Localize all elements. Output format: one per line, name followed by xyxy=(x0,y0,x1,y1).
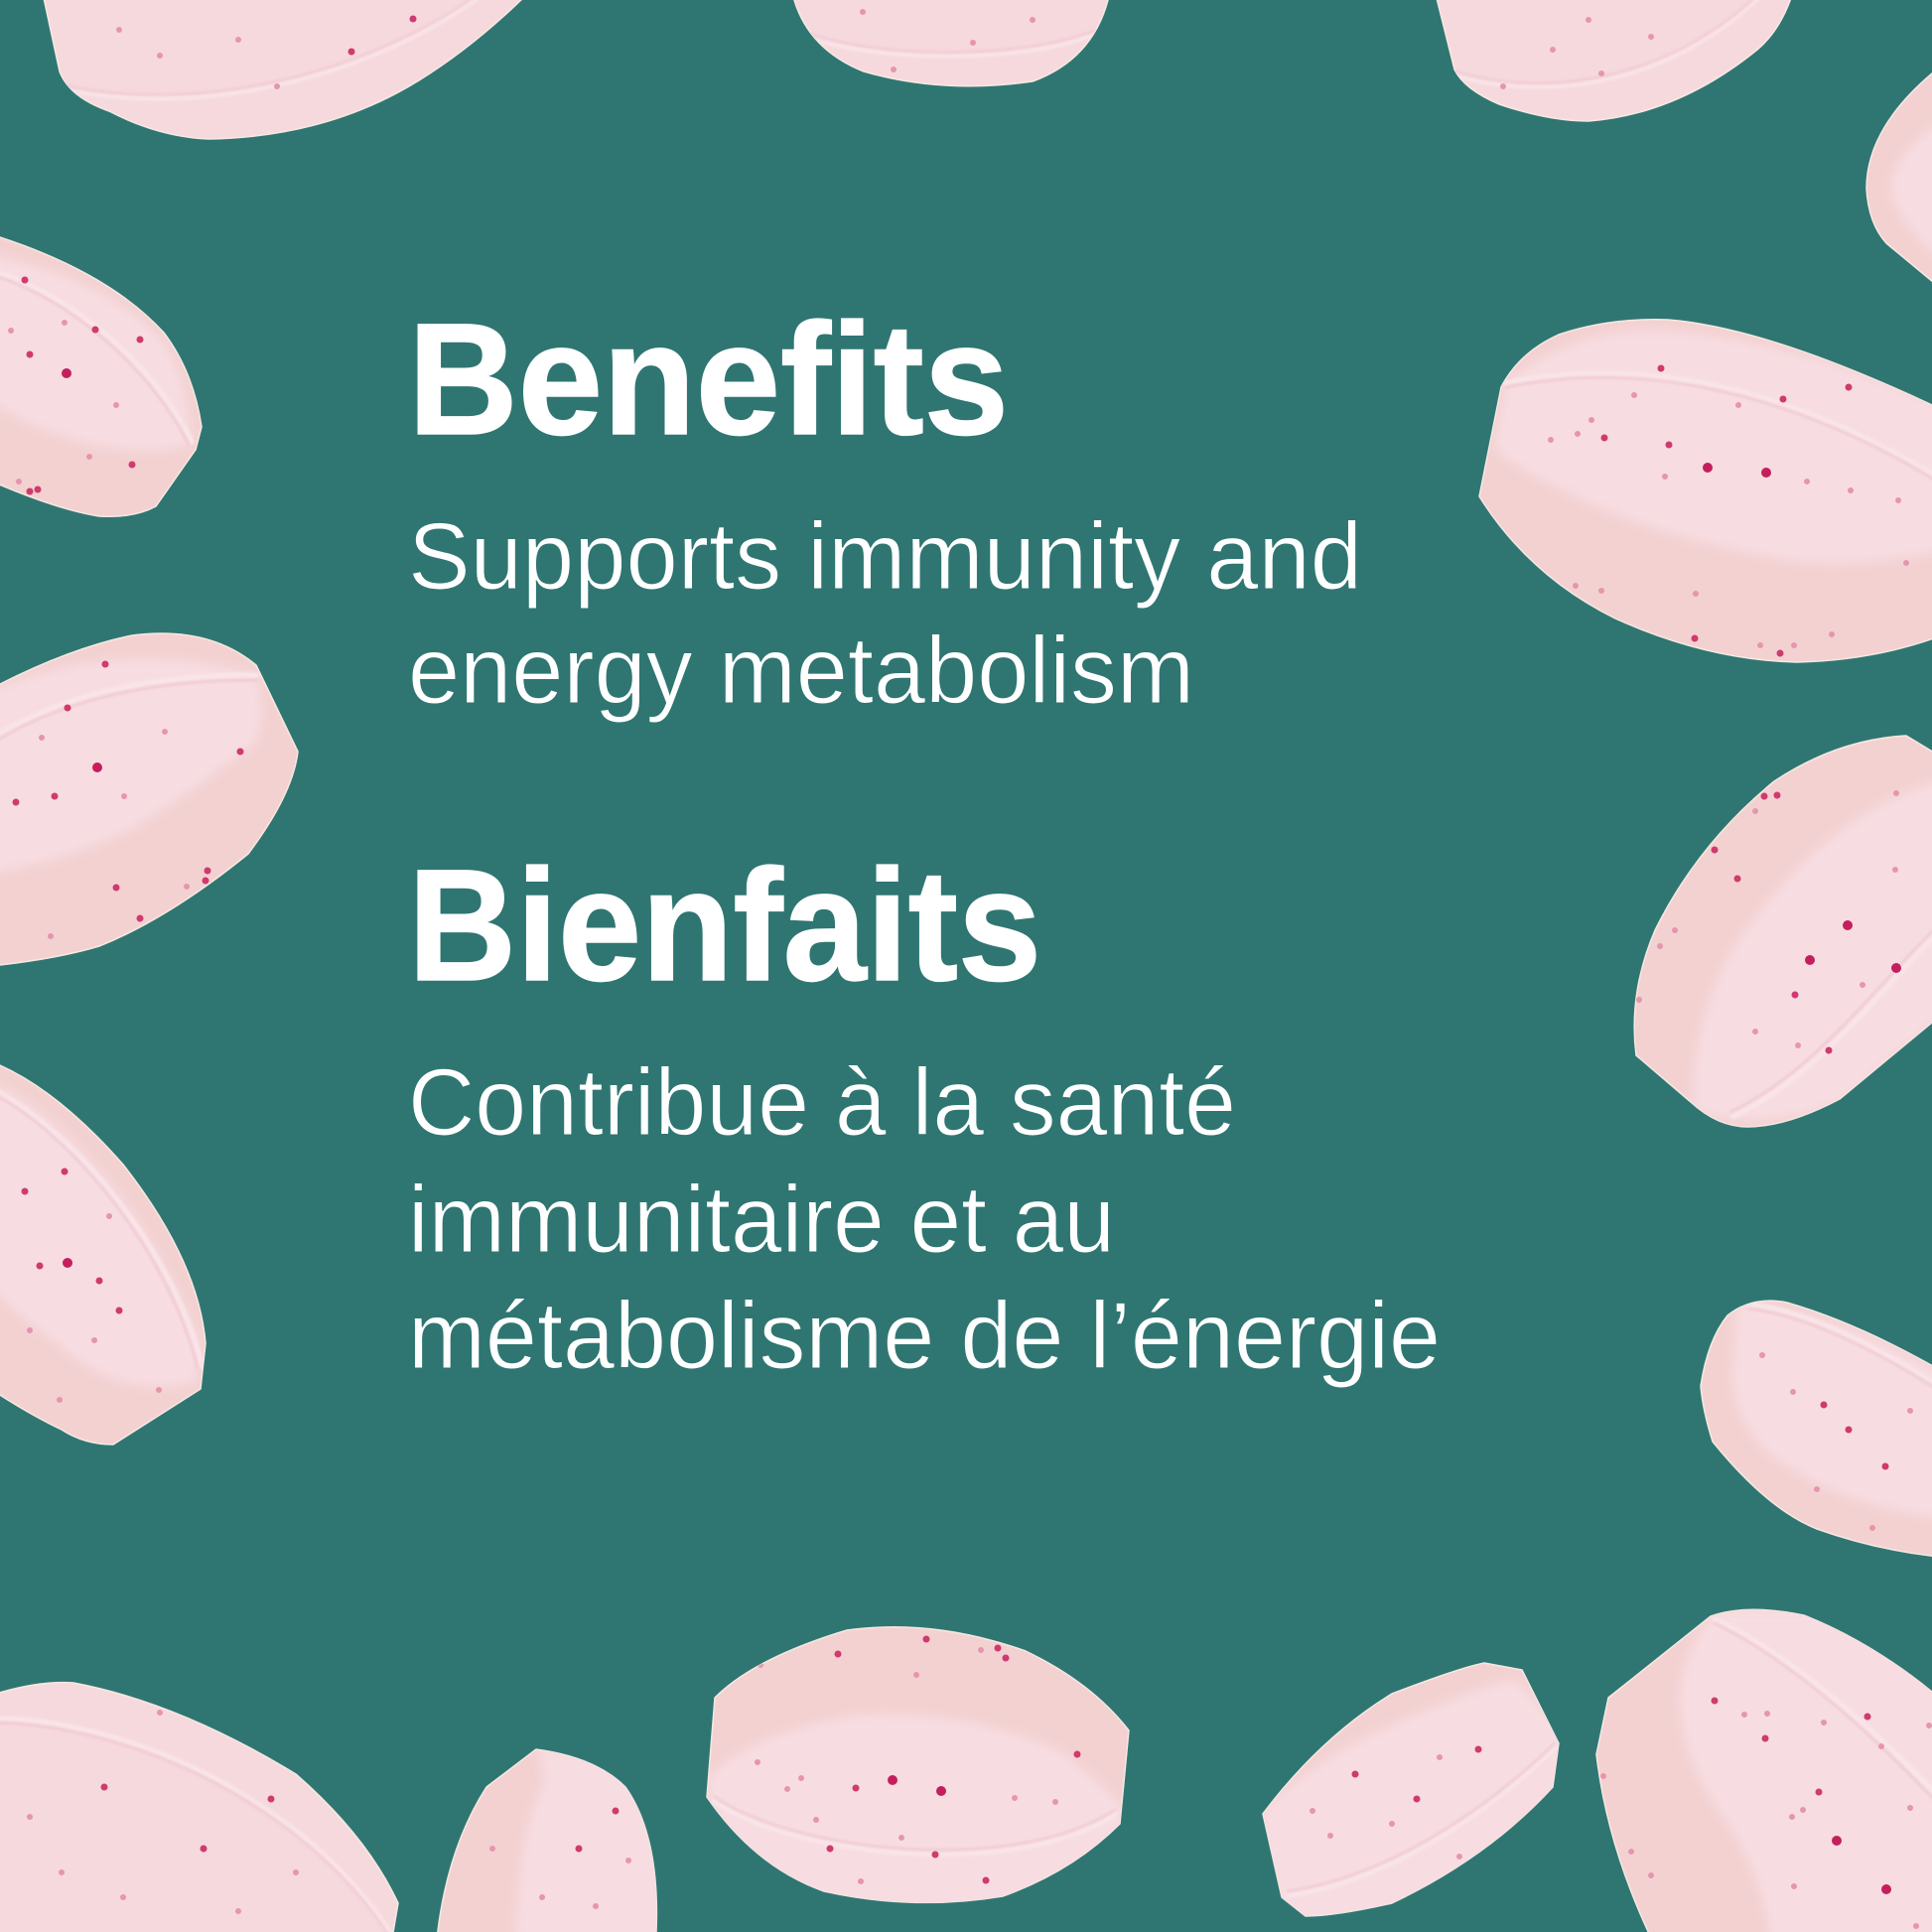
tablet: bottom small xyxy=(435,1742,665,1932)
tablet: left lower xyxy=(0,1050,206,1445)
heading: Bienfaits: Bienfaits xyxy=(408,836,1041,1014)
text block: English benefit: Supports immunity and xyxy=(408,503,1362,610)
tablet: left middle xyxy=(0,633,298,968)
tablet: right lower xyxy=(1701,1301,1932,1559)
tablet: bottom right large xyxy=(1596,1608,1932,1932)
heading: Benefits: Benefits xyxy=(408,290,1009,468)
text block: English benefit xyxy=(408,503,1362,724)
tablet: right edge top xyxy=(1865,72,1932,282)
tablet: top right xyxy=(1430,0,1799,121)
tablet: bottom center xyxy=(707,1627,1129,1916)
tablet: right middle xyxy=(1634,736,1932,1127)
tablet: top left xyxy=(38,0,531,139)
tablet: bottom right center xyxy=(1261,1663,1569,1926)
tablet: top center xyxy=(788,0,1108,86)
tablet: right large xyxy=(1479,320,1932,662)
tablet: left upper xyxy=(0,226,202,516)
text block: French benefit xyxy=(408,1049,1441,1389)
tablet: bottom left xyxy=(0,1683,398,1932)
text block: French benefit: Contribue à la santé xyxy=(408,1049,1236,1156)
text block: English benefit: energy metabolism xyxy=(408,618,1194,724)
text block: French benefit: métabolisme de l’énergie xyxy=(408,1283,1441,1389)
text block: French benefit: immunitaire et au xyxy=(408,1167,1115,1273)
